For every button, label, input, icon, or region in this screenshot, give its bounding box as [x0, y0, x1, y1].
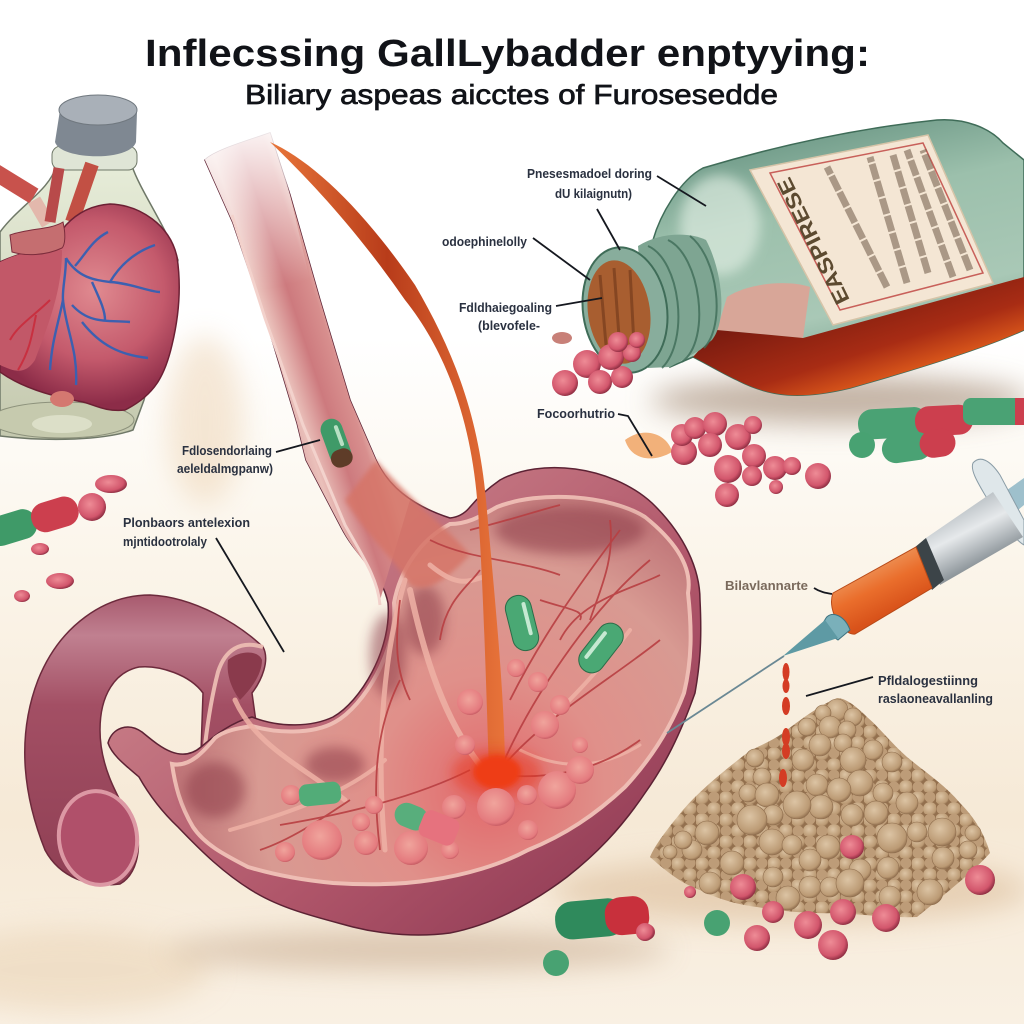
callout: spill label	[537, 407, 652, 456]
tube opening	[53, 786, 143, 890]
stomach cavity	[172, 497, 691, 884]
red veins	[260, 505, 660, 850]
callout: fill label: (blevofele-	[478, 319, 540, 333]
neck ribs	[648, 236, 717, 368]
title: Inflecssing GallLybadder enptyying:	[145, 33, 870, 75]
callout: duct label	[177, 440, 320, 476]
callout: duct label: Fdlosendorlaing	[182, 444, 272, 458]
illustration: stomach	[108, 128, 701, 935]
duct lower tissue	[345, 460, 470, 588]
spilled pills	[552, 332, 645, 396]
callout: syringe label: Bilavlannarte	[725, 579, 808, 593]
callout: intestine label: mjntidootrolaly	[123, 535, 207, 549]
glass highlight	[680, 175, 760, 275]
heart vessels	[50, 232, 160, 385]
illustration: heart in glass jar	[0, 95, 179, 439]
capsules left	[0, 475, 127, 602]
callout: top bottle labels: dU kilaignutn)	[555, 187, 632, 201]
illustration: pill mound	[633, 698, 995, 960]
capsule and pills at bottom	[543, 895, 730, 976]
icon: grey jar cap	[55, 95, 137, 156]
callout: mouth label: odoephinelolly	[442, 235, 527, 249]
duct fade	[200, 128, 320, 323]
jar neck band	[52, 146, 137, 170]
needle	[667, 656, 784, 733]
illustration: intestine tube	[25, 595, 266, 890]
tissue strands	[230, 565, 640, 850]
callout: spill label: Focoorhutrio	[537, 407, 615, 421]
heart	[0, 204, 179, 410]
lesions	[275, 659, 594, 865]
duct fill	[205, 133, 410, 600]
subtitle: Biliary aspeas aicctes of Furosesedde	[245, 79, 778, 110]
callout: duct label: aeleldalmgpanw)	[177, 462, 273, 476]
plunger rod	[1000, 478, 1024, 515]
callout: mound label: Pfldalogestiinng	[878, 674, 978, 688]
powder inside bottle	[717, 283, 810, 338]
illustration: tipped medicine bottle	[552, 120, 1024, 396]
label	[750, 135, 993, 325]
illustration: syringe	[667, 459, 1024, 787]
cavity shadows	[185, 506, 645, 818]
callout: syringe label	[725, 579, 832, 594]
silver barrel	[923, 492, 1023, 585]
bottle neck	[638, 235, 721, 368]
drops	[779, 663, 790, 787]
needle cone	[783, 620, 838, 656]
callout: fill label	[459, 298, 602, 333]
callout: top bottle labels: Pnesesmadoel doring	[527, 167, 652, 181]
bottle mouth	[575, 242, 675, 378]
flange	[972, 459, 1024, 545]
capsules in stomach	[298, 593, 628, 848]
orange bile stream	[270, 142, 505, 772]
capsules right	[849, 398, 1024, 465]
callout: mouth label	[442, 235, 590, 280]
hub	[820, 614, 850, 640]
callout: mound label: raslaoneavallanling	[878, 692, 993, 706]
liquid	[693, 277, 1024, 395]
black band	[914, 538, 944, 590]
duct highlight	[232, 215, 380, 605]
callout: top bottle labels	[527, 167, 706, 250]
duct capsule	[317, 416, 355, 470]
red pills on mound	[633, 835, 995, 960]
callout: intestine label: Plonbaors antelexion	[123, 516, 250, 530]
callout: fill label: Fdldhaiegoaling	[459, 301, 552, 315]
orange spill and pill cluster	[625, 412, 831, 507]
orange barrel	[831, 547, 932, 634]
callout: intestine label	[123, 516, 284, 652]
bottle body	[653, 120, 1024, 395]
red splash	[452, 749, 542, 797]
callout: mound label	[806, 674, 993, 706]
label text: EASPIRESE	[773, 174, 854, 308]
